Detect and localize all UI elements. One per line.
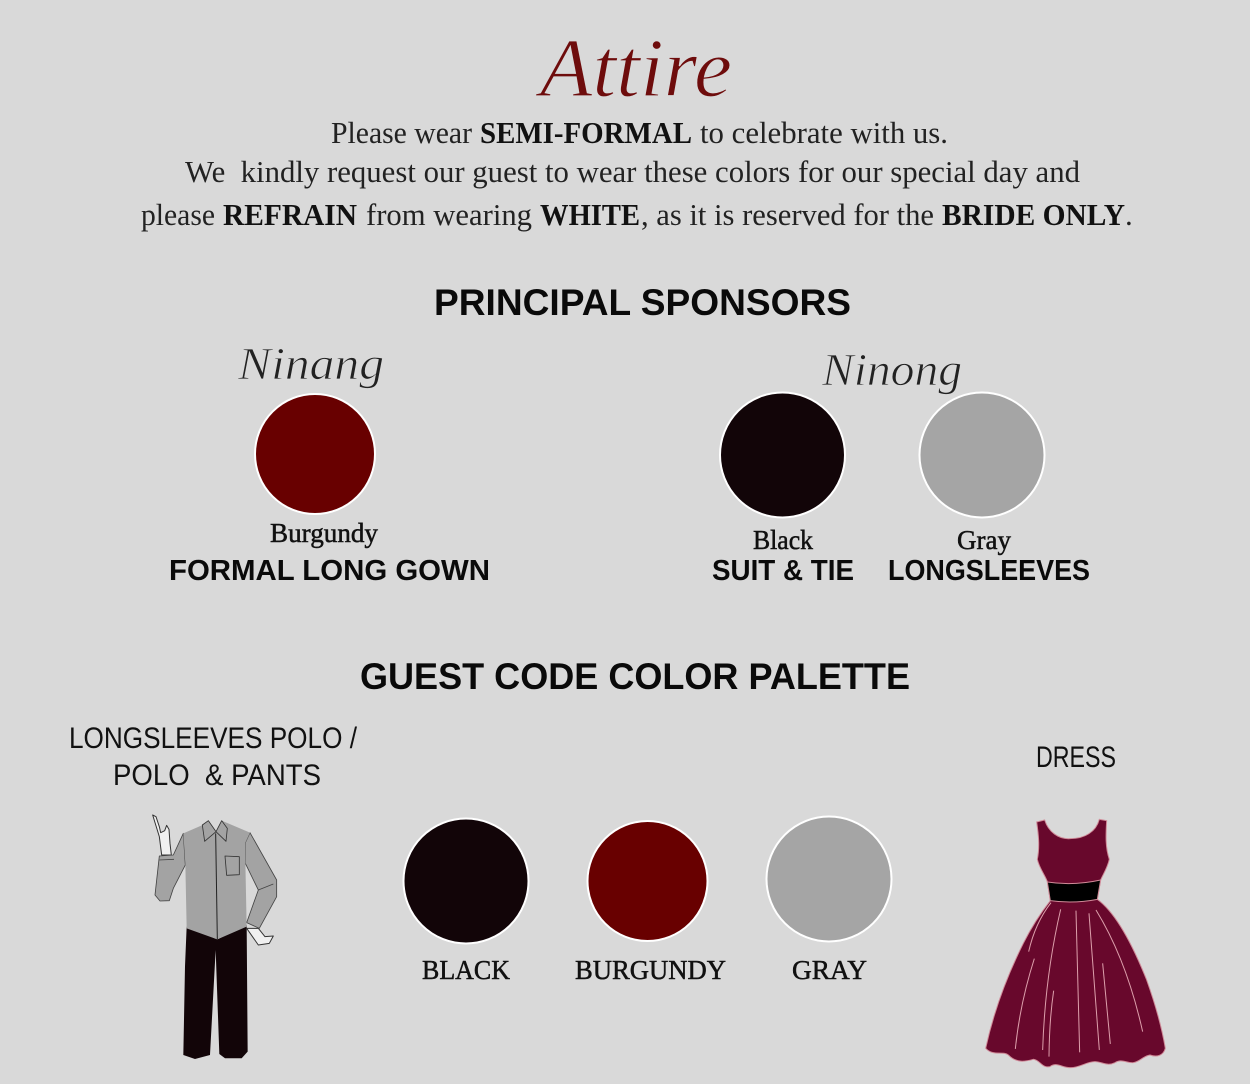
label: men's attire: LONGSLEEVES POLO / [69,722,358,755]
heading: guest code color palette: GUEST CODE COLOR PALETTE [360,656,910,697]
label: BLACK: BLACK [422,955,510,985]
label: longsleeves: LONGSLEEVES [888,555,1090,587]
icon: man in polo and pants [153,815,277,1059]
label: Ninong right: Ninong [821,344,962,395]
label: suit and tie: SUIT & TIE [712,555,854,587]
swatch: black [404,818,528,944]
label: Burgundy: Burgundy [270,518,378,548]
label: Black: Black [753,525,813,555]
swatch: burgundy [588,821,708,941]
intro text: to celebrate with us. [700,115,948,150]
intro text: Please wear [331,115,473,150]
heading: principal sponsors: PRINCIPAL SPONSORS [434,282,851,323]
swatch: burgundy gown [255,394,375,514]
label: Gray: Gray [957,525,1011,555]
intro text: REFRAIN [223,197,357,232]
intro text [141,115,1133,232]
icon: burgundy dress [986,819,1165,1068]
label: formal long gown: FORMAL LONG GOWN [169,555,490,587]
title: Attire: Attire [535,22,732,115]
swatch: gray longsleeves [920,392,1044,518]
intro text: from wearing [366,197,532,232]
intro text: please [141,197,215,232]
intro text: We kindly request our guest to wear these colors for our special day and [185,154,1080,189]
swatch: black suit [720,392,845,518]
label: GRAY: GRAY [792,955,867,985]
intro text: . [1125,197,1133,232]
label: men's attire: POLO & PANTS [113,759,321,792]
intro text: BRIDE ONLY [942,197,1125,232]
label: dress: DRESS [1036,741,1116,774]
intro text: WHITE [540,197,640,232]
intro text: SEMI-FORMAL [480,115,692,150]
swatch: gray [766,816,892,942]
intro text: , as it is reserved for the [641,197,934,232]
label: BURGUNDY: BURGUNDY [575,955,726,985]
label: men's attire [69,722,358,792]
label: Ninang left: Ninang [237,338,384,389]
